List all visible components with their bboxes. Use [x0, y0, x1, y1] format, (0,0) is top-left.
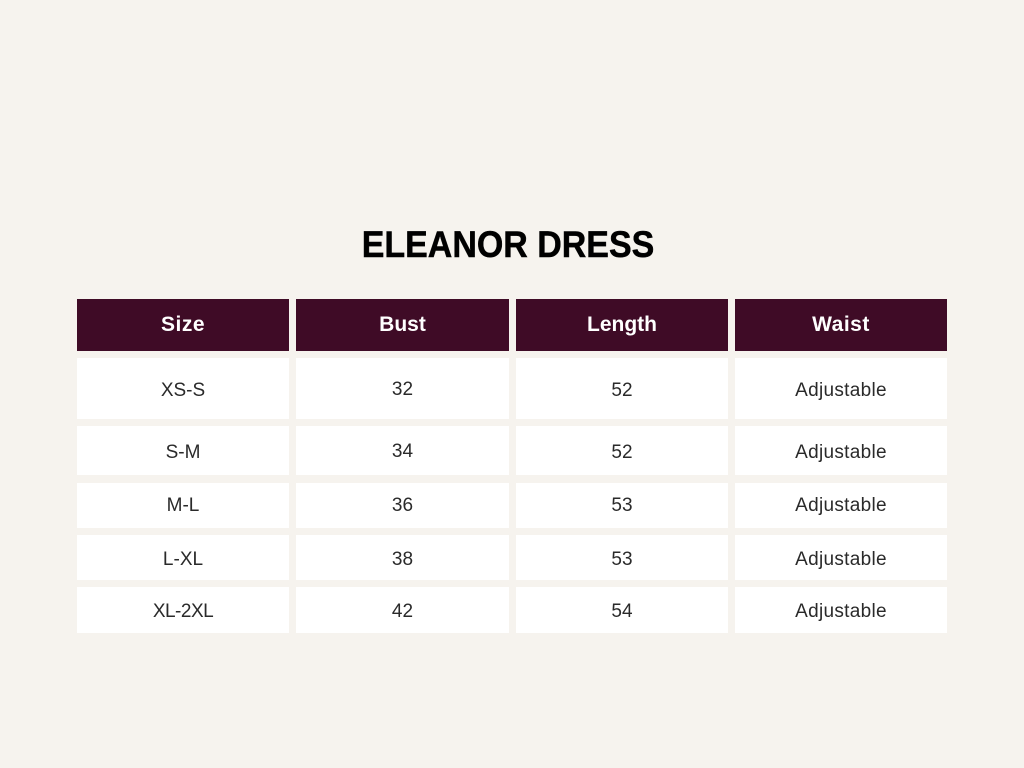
row M-L bust	[296, 483, 509, 528]
header: waist: Waist	[812, 313, 870, 336]
row L-XL waist: Adjustable	[795, 548, 887, 570]
header: size: Size	[161, 313, 205, 336]
row M-L waist	[735, 483, 947, 528]
row XL-2XL length: 54	[611, 601, 633, 622]
row XS-S waist	[735, 358, 947, 419]
row L-XL size	[77, 535, 289, 580]
row XL-2XL waist	[735, 587, 947, 633]
header: length: Length	[587, 313, 657, 336]
row XS-S size: XS-S	[161, 380, 205, 400]
row S-M size	[77, 426, 289, 475]
header: size	[77, 299, 289, 351]
row S-M waist: Adjustable	[795, 442, 887, 462]
row XS-S bust: 32	[392, 378, 413, 400]
row L-XL bust: 38	[392, 548, 413, 570]
row S-M length	[516, 426, 728, 475]
row M-L size: M-L	[167, 494, 199, 516]
row XL-2XL waist: Adjustable	[795, 601, 887, 622]
row XL-2XL bust: 42	[392, 601, 413, 622]
row XS-S length	[516, 358, 728, 419]
row S-M size: S-M	[166, 442, 200, 462]
row XL-2XL size	[77, 587, 289, 633]
row L-XL length	[516, 535, 728, 580]
row XS-S bust	[296, 358, 509, 419]
header: waist	[735, 299, 947, 351]
row L-XL length: 53	[611, 548, 633, 570]
header: length	[516, 299, 728, 351]
row S-M length: 52	[611, 442, 633, 462]
header: bust	[296, 299, 509, 351]
row M-L waist: Adjustable	[795, 494, 887, 516]
row L-XL waist	[735, 535, 947, 580]
row L-XL size: L-XL	[163, 548, 203, 570]
row XL-2XL size: XL-2XL	[153, 601, 213, 622]
header: bust: Bust	[379, 313, 426, 336]
row M-L bust: 36	[392, 494, 413, 516]
row XS-S waist: Adjustable	[795, 380, 887, 400]
title: ELEANOR DRESS	[362, 224, 654, 265]
row S-M bust: 34	[392, 440, 413, 462]
row M-L size	[77, 483, 289, 528]
row M-L length	[516, 483, 728, 528]
row S-M bust	[296, 426, 509, 475]
size table	[77, 299, 947, 633]
row XS-S length: 52	[611, 380, 633, 400]
row XL-2XL length	[516, 587, 728, 633]
row M-L length: 53	[611, 494, 633, 516]
row L-XL bust	[296, 535, 509, 580]
row XL-2XL bust	[296, 587, 509, 633]
row XS-S size	[77, 358, 289, 419]
row S-M waist	[735, 426, 947, 475]
